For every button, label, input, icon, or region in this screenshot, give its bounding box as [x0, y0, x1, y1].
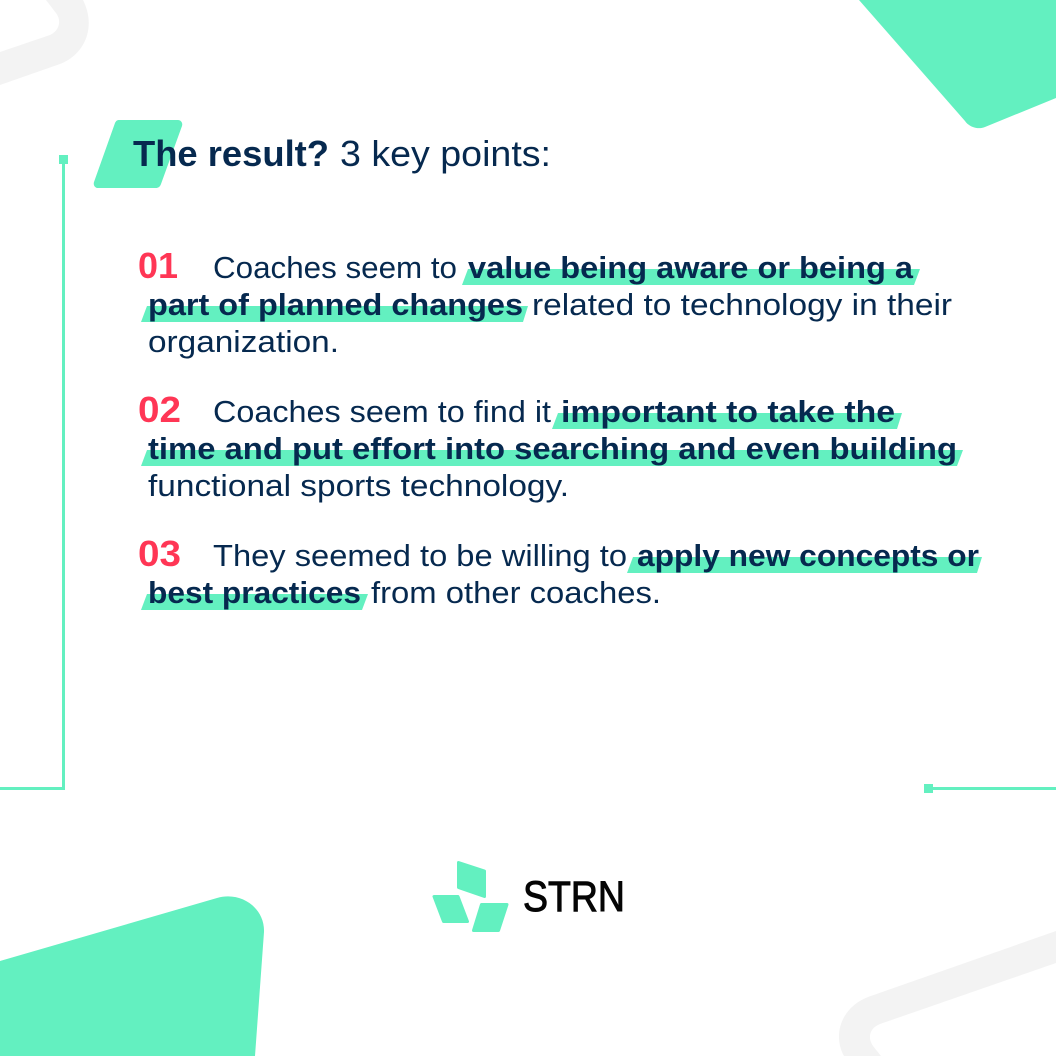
text 03: apply new concepts or	[637, 538, 979, 573]
text 01: value being aware or being a	[468, 250, 914, 285]
heading light text: 3 key points:	[340, 133, 551, 174]
frame line: left vertical and bottom	[0, 155, 68, 790]
frame line: bottom right	[924, 784, 1056, 793]
background green shape: top right	[859, 0, 1056, 128]
heading accent parallelogram	[94, 120, 182, 188]
highlights 02	[141, 413, 963, 466]
text 01: related to technology in their	[532, 287, 952, 322]
heading	[94, 120, 329, 188]
logo icon	[434, 862, 507, 930]
logo wordmark: STRN	[523, 873, 625, 921]
highlights 03	[141, 557, 982, 610]
text 03: They seemed to be willing to	[213, 538, 627, 573]
background outline shape: top left	[0, 0, 89, 85]
text 03	[148, 538, 979, 610]
background green shape: bottom left	[0, 896, 264, 1056]
logo: STRN	[434, 862, 625, 930]
text 02	[148, 394, 957, 503]
highlights 01	[141, 269, 920, 322]
text 01	[148, 250, 952, 359]
text 02: time and put effort into searching and even building	[148, 431, 957, 466]
point 02	[138, 389, 963, 503]
number 02: 02	[138, 389, 181, 430]
point 01	[138, 245, 952, 359]
text 03: best practices	[148, 575, 361, 610]
text 01: Coaches seem to	[213, 250, 457, 285]
number 01: 01	[138, 245, 178, 286]
number 03: 03	[138, 533, 181, 574]
background outline shape: bottom right	[839, 931, 1056, 1056]
text 03: from other coaches.	[371, 575, 661, 610]
point 03	[138, 533, 982, 610]
heading text: The result?	[133, 133, 329, 174]
text 02: functional sports technology.	[148, 468, 569, 503]
text 01: part of planned changes	[148, 287, 523, 322]
text 02: important to take the	[561, 394, 895, 429]
text 01: organization.	[148, 324, 339, 359]
text 02: Coaches seem to find it	[213, 394, 551, 429]
